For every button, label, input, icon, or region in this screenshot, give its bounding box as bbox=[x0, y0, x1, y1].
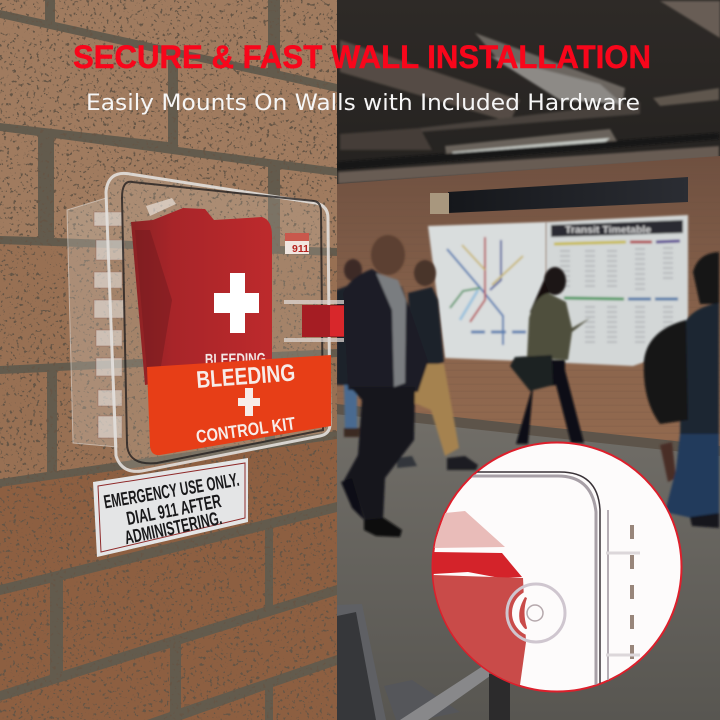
hinge bbox=[94, 212, 124, 438]
floor bbox=[335, 414, 720, 720]
middle bricks bbox=[0, 244, 337, 479]
transit timetable board: Transit Timetable bbox=[565, 224, 651, 236]
mortar base bbox=[0, 0, 337, 720]
clear protective case bbox=[67, 173, 344, 471]
warning sign bbox=[93, 458, 248, 557]
man with backpack bbox=[644, 252, 719, 528]
orange label panel bbox=[147, 355, 331, 455]
sign line 1: EMERGENCY USE ONLY. bbox=[102, 470, 241, 513]
label BLEEDING: BLEEDING bbox=[195, 359, 296, 394]
white cross bbox=[214, 273, 259, 333]
ceiling beams and lights bbox=[337, 1, 720, 184]
sign line 2: DIAL 911 AFTER bbox=[125, 491, 223, 530]
metal bench bbox=[335, 604, 510, 720]
red first aid bag bbox=[131, 208, 272, 385]
brick speckle texture bbox=[0, 0, 337, 720]
man in black jacket bbox=[341, 235, 428, 537]
upper bricks bbox=[0, 0, 337, 248]
lower bricks bbox=[0, 439, 337, 720]
panel: subway station background bbox=[335, 0, 720, 720]
ceiling bbox=[335, 0, 720, 185]
dark sign band bbox=[448, 177, 688, 213]
wall base band bbox=[337, 404, 720, 458]
transit timetable board bbox=[546, 215, 688, 366]
transit map board bbox=[428, 222, 546, 362]
case back plate and hinge flange bbox=[67, 198, 117, 447]
label cross bbox=[238, 388, 260, 416]
subtitle: Easily Mounts On Walls with Included Hardware bbox=[86, 91, 640, 116]
911 sticker: 911 bbox=[292, 243, 309, 255]
panel: brick wall pillar bbox=[0, 0, 337, 720]
background man far left bbox=[336, 259, 366, 437]
passenger group walking bbox=[336, 235, 719, 537]
sign end plaque bbox=[430, 193, 449, 214]
zoom callout: case hinge close-up bbox=[432, 442, 682, 692]
back brick wall bbox=[337, 156, 720, 456]
man in beige trousers bbox=[397, 260, 478, 470]
911 sticker bbox=[285, 233, 309, 255]
case body bbox=[106, 173, 330, 471]
woman with handbag bbox=[510, 267, 590, 444]
bag label text: BLEEDING bbox=[205, 351, 266, 369]
red latch bbox=[284, 300, 344, 342]
label CONTROL KIT: CONTROL KIT bbox=[195, 413, 297, 447]
glare bbox=[146, 198, 176, 216]
sign line 3: ADMINISTERING. bbox=[123, 508, 224, 549]
title: SECURE & FAST WALL INSTALLATION bbox=[73, 39, 651, 75]
